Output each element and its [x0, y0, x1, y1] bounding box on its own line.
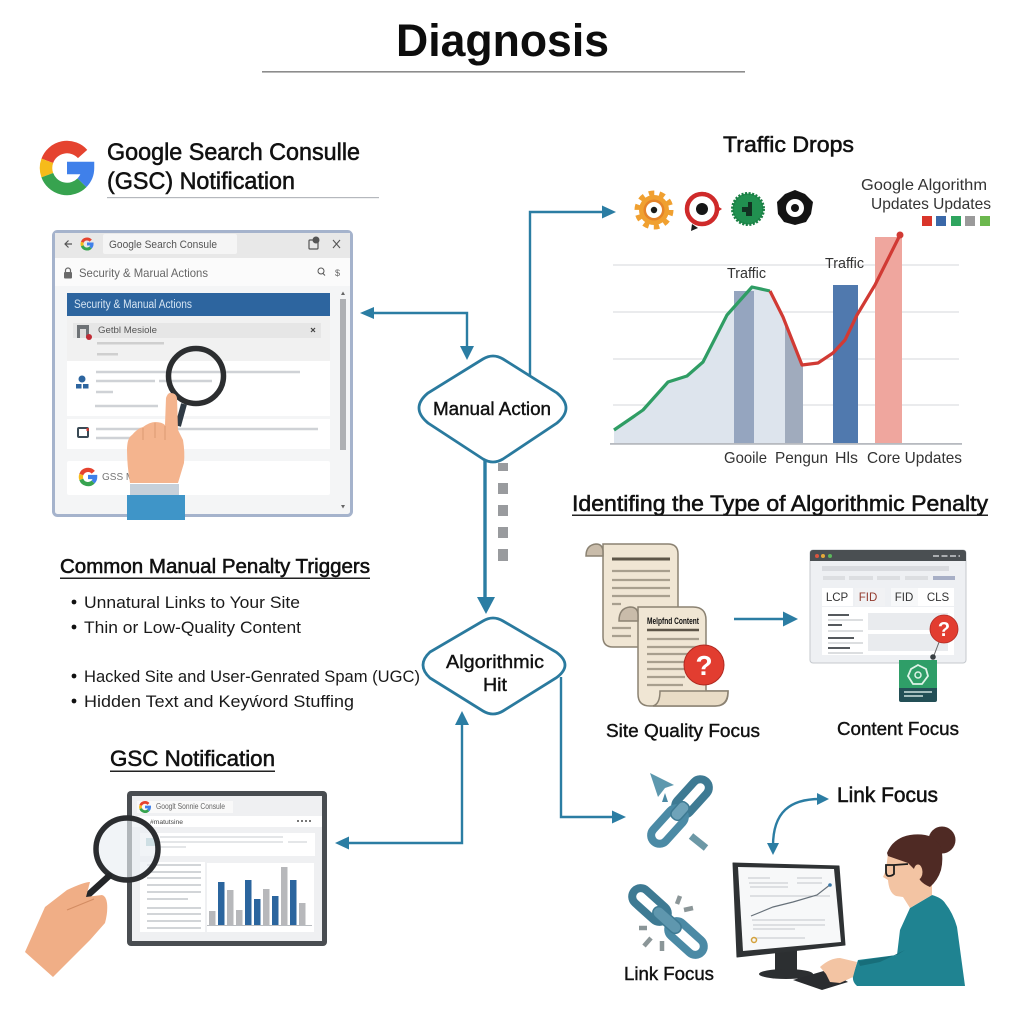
hand: [820, 958, 857, 983]
address row: Security & Marual Actions: [79, 266, 208, 280]
icon: broken chain upper: [648, 773, 712, 848]
title: Diagnosis: [396, 15, 609, 66]
blue section header: [67, 293, 330, 316]
legend: google algorithm updates: Google Algorithm: [861, 177, 987, 194]
glasses: [886, 864, 908, 876]
arrow: manual action to algorithmic hit: [477, 460, 495, 614]
metric cards: [822, 588, 954, 606]
chart labels: Core Updates: [867, 450, 962, 467]
metric cards: FID: [895, 592, 913, 604]
tablet message card: [140, 833, 315, 856]
message row 3: [67, 419, 330, 449]
metric cards: FID: [859, 592, 877, 604]
chart labels: Traffic: [825, 256, 864, 272]
icon: question badge and green content tag: ?: [938, 619, 950, 641]
decision: algorithmic hit: [423, 618, 565, 714]
bar: grey-blue: [734, 291, 754, 444]
arrow: site quality to content focus: [734, 612, 798, 626]
message row 4 with google logo: [67, 461, 330, 495]
arrow: browser to manual action: [360, 307, 474, 360]
arrow: algorithmic hit to gsc notification: [335, 711, 469, 850]
tablet bar chart: [207, 863, 314, 932]
green traffic line: [614, 287, 770, 430]
decision: manual action: Manual Action: [433, 399, 551, 419]
panel: core web vitals browser: [810, 550, 966, 663]
icon: red question badge: [684, 645, 724, 685]
bullet list: Unnatural Links to Your Site: [84, 593, 300, 612]
label: link focus lower: Link Focus: [624, 964, 714, 984]
message row 1: [67, 316, 330, 361]
area under traffic: [614, 287, 790, 444]
address row: $: [335, 268, 340, 278]
metric cards: CLS: [927, 592, 950, 604]
chart labels: Gooile: [724, 450, 767, 467]
decision: algorithmic hit: Algorithmic: [446, 652, 544, 672]
heading: traffic drops: Traffic Drops: [723, 132, 854, 157]
icon: orange gear: [637, 193, 671, 227]
heading: Common Manual Penalty Triggers: [60, 556, 370, 578]
chart labels: Pengun: [775, 450, 828, 467]
connector: dashed grey: [498, 463, 508, 561]
panel: common manual penalty triggers: [60, 556, 420, 711]
chart labels: Traffic: [727, 266, 766, 282]
heading: google search console notification: Google Search Consulle: [107, 139, 360, 166]
label: content focus: Content Focus: [837, 719, 959, 739]
icon: back scroll document: [586, 544, 678, 647]
bullet list: Hacked Site and User-Genrated Spam (UGC): [84, 667, 420, 686]
icon: helpful content scroll: Melpfnd Content: [647, 616, 700, 627]
icon: magnifier and pointing hand: [127, 348, 224, 520]
browser top bar: Google Search Consule: [109, 239, 217, 251]
sweater fold: [858, 950, 905, 966]
icon: google logo: [46, 147, 88, 189]
metric cards: LCP: [826, 592, 849, 604]
lower report: [822, 607, 954, 655]
ear: [914, 864, 922, 880]
arrow: curved link focus: [767, 793, 829, 855]
chart: traffic line and update bars: [610, 232, 962, 467]
message row 1: Getbl Mesiole: [98, 325, 157, 336]
legend: google algorithm updates: Updates Updates: [871, 196, 991, 213]
label: link focus upper: Link Focus: [837, 784, 938, 807]
icon: red gear: [687, 192, 722, 231]
bullet list: Hidden Text and Keyẃord Stuffing: [84, 692, 354, 711]
icon: green gear: [732, 194, 764, 224]
icon: black gear: [777, 190, 813, 225]
heading: gsc notification: GSC Notification: [110, 746, 275, 771]
icon: question badge and green content tag: [899, 615, 958, 702]
tablet text card: [140, 862, 205, 932]
message row 2: [67, 361, 330, 416]
arrow: manual action to traffic drops: [530, 206, 616, 375]
decision: manual action: [419, 356, 566, 462]
heading: google search console notification: [107, 139, 379, 198]
icon: broken chain lower: [629, 885, 707, 958]
bar: red: [875, 237, 902, 444]
tablet header: [132, 801, 322, 827]
address row: [55, 258, 350, 286]
face and neck: [883, 850, 932, 908]
panel: search console browser window: [54, 232, 352, 516]
chart labels: [724, 256, 962, 467]
browser top bar: [55, 233, 350, 258]
message row 4 with google logo: GSS Mr: [102, 472, 138, 483]
bullet list: [72, 593, 420, 711]
blue section header: Security & Manual Actions: [74, 299, 192, 311]
bullet list: Thin or Low-Quality Content: [84, 618, 301, 637]
heading: identifying the type of algorithmic penalty: Identifing the Type of Algorithmic Penalty: [572, 491, 988, 516]
icon: desktop monitor: [733, 863, 845, 979]
scrollbar: [340, 292, 346, 508]
chart labels: Hls: [835, 450, 858, 467]
tablet header: Googlt Sonnie Consule: [156, 802, 225, 811]
arrow: algorithmic hit to link focus: [561, 677, 626, 824]
icon: red question badge: ?: [695, 650, 713, 681]
hair and bun: [887, 826, 956, 887]
icon: hand holding magnifier: [25, 818, 158, 977]
icon: helpful content scroll: [619, 607, 728, 706]
legend: google algorithm updates: [861, 177, 991, 226]
figure: woman at computer: [820, 826, 965, 986]
decision: algorithmic hit: Hit: [483, 675, 507, 695]
bar: grey: [785, 322, 803, 444]
icon: keyboard: [793, 970, 848, 990]
icons: algorithm update gears: [637, 190, 813, 231]
heading: google search console notification: (GSC) Notification: [107, 168, 295, 195]
tablet header: #matutsine: [150, 820, 184, 826]
sweater: [853, 895, 965, 986]
panel: tablet with search console report: [127, 791, 327, 946]
label: site quality focus: Site Quality Focus: [606, 721, 760, 741]
bar: blue: [833, 285, 858, 444]
red traffic line: [770, 232, 904, 365]
